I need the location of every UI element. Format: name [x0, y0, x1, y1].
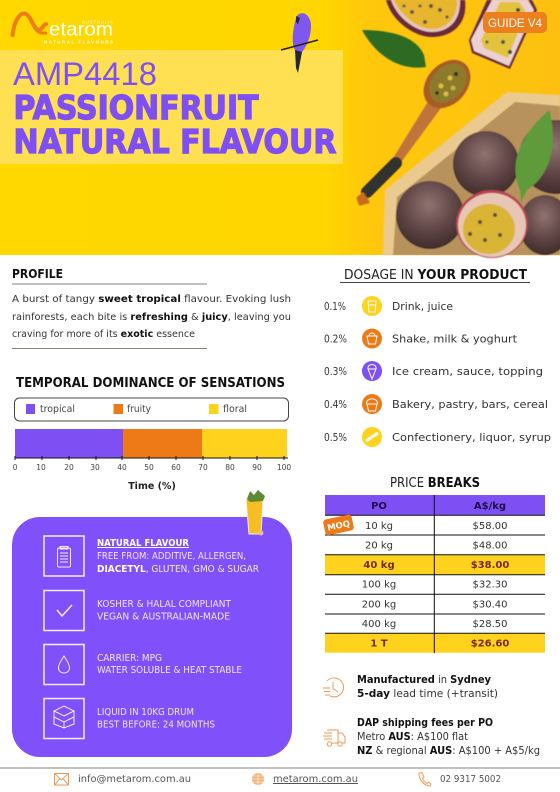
email: info@metarom.com.au: [78, 774, 191, 785]
dosage row: drink: Drink, juice: [392, 300, 453, 313]
icon: delivery truck: [323, 730, 345, 746]
icon: purple parrot: [281, 13, 318, 73]
axis label: Time (%): [128, 481, 176, 492]
dosage row: ice cream: [324, 361, 543, 381]
dosage row: confectionery: [324, 427, 551, 447]
table: price breaks: [323, 476, 545, 653]
icon: water drop: [44, 644, 84, 684]
time axis: [13, 456, 291, 472]
whole passionfruits: [396, 120, 560, 255]
legend: fruity: [127, 404, 151, 415]
table rows: 100 kg: [362, 580, 396, 590]
attribute text: natural flavour: FREE FROM: ADDITIVE, ALLERGEN,: [97, 551, 246, 562]
title: [13, 56, 336, 161]
dosage row: ice cream: Ice cream, sauce, topping: [392, 365, 543, 378]
table rows: 400 kg: [362, 619, 396, 630]
legend: tropical: [40, 404, 75, 415]
legend: floral: [223, 404, 247, 415]
profile description: rainforests, each bite is refreshing & juicy, leaving you: [12, 312, 291, 323]
header banner: [0, 0, 560, 258]
time axis: 20: [64, 463, 74, 472]
dosage row: bakery: 0.4%: [324, 398, 347, 411]
icon: clock: [323, 678, 344, 697]
logo: Metarom: AUSTRALIA: [82, 20, 113, 24]
chart title: TEMPORAL DOMINANCE OF SENSATIONS: [16, 376, 285, 391]
dosage row: drink: 0.1%: [324, 300, 346, 313]
manufacturing info: Manufactured in Sydney: [357, 673, 491, 686]
title: AMP4418: [13, 56, 157, 92]
passionfruit half, bottom: [456, 190, 528, 258]
table rows: $32.30: [472, 580, 508, 590]
icon: globe: [252, 773, 264, 785]
phone number: 02 9317 5002: [440, 774, 501, 785]
badge: MOQ: [323, 514, 354, 536]
wooden box: [383, 92, 560, 255]
panel: profile: PROFILE: [12, 266, 63, 281]
table rows: [362, 501, 509, 650]
attribute text: compliance: KOSHER & HALAL COMPLIANT: [97, 599, 231, 610]
icon: cocktail glass: [246, 490, 265, 536]
time axis: 60: [171, 463, 181, 472]
shipping info: Metro AUS: A$100 flat: [357, 730, 469, 743]
attribute text: packaging: [97, 707, 215, 730]
table heading: PRICE BREAKS: [390, 476, 480, 491]
time axis: 0: [13, 463, 18, 472]
dosage row: ice cream: 0.3%: [324, 365, 347, 378]
badge: guide version: [483, 12, 547, 33]
table rows: $30.40: [472, 600, 508, 610]
attribute text: carrier: [97, 653, 242, 676]
table rows: A$/kg: [474, 501, 506, 512]
table rows: $48.00: [472, 540, 508, 552]
time axis: 90: [252, 463, 262, 472]
attribute text: compliance: [97, 599, 231, 622]
table rows: $58.00: [472, 521, 508, 532]
attribute text: natural flavour: DIACETYL, GLUTEN, GMO & SUGAR: [97, 564, 260, 575]
time axis: 80: [225, 463, 235, 472]
logo: Metarom: NATURAL FLAVOURS: [44, 40, 113, 44]
wooden spoon: [358, 51, 480, 204]
time axis: 100: [277, 463, 291, 472]
shipping info: DAP shipping fees per PO: [357, 716, 493, 729]
green leaf, top: [362, 30, 426, 68]
time axis: 30: [90, 463, 100, 472]
time axis: 40: [117, 463, 127, 472]
badge: MOQ: MOQ: [327, 519, 351, 534]
profile description: A burst of tangy sweet tropical flavour. Evoking lush: [12, 294, 291, 305]
icon: check mark: [44, 590, 84, 630]
shipping info: NZ & regional AUS: A$100 + A$5/kg: [357, 744, 540, 757]
attribute text: compliance: VEGAN & AUSTRALIAN-MADE: [97, 612, 230, 622]
icon: clipboard: [44, 536, 84, 576]
attribute text: natural flavour: NATURAL FLAVOUR: [97, 538, 189, 549]
green leaf, box: [515, 110, 553, 202]
profile description: craving for more of its exotic essence: [12, 329, 195, 340]
stacked bar: [15, 429, 287, 458]
dosage row: shake: Shake, milk & yoghurt: [392, 332, 518, 346]
table rows: $28.50: [472, 619, 508, 630]
table rows: 1 T: [370, 638, 388, 650]
dosage row: shake: [324, 328, 518, 348]
dosage row: confectionery: Confectionery, liquor, syrup: [392, 431, 551, 444]
time axis: 10: [36, 463, 46, 472]
icon: open box: [44, 698, 84, 738]
table rows: 200 kg: [362, 600, 396, 610]
legend: [14, 398, 288, 421]
manufacturing info: 5-day lead time (+transit): [357, 687, 498, 700]
footer contacts: [54, 772, 501, 786]
website: metarom.com.au: [273, 774, 358, 785]
attribute text: carrier: CARRIER: MPG: [97, 653, 162, 664]
icon: phone: [419, 772, 431, 786]
table rows: 40 kg: [363, 560, 395, 571]
logo: Metarom: etarom: [49, 20, 113, 40]
shipping info: [323, 716, 540, 757]
title background strip: [0, 50, 343, 164]
time axis: 50: [144, 463, 154, 472]
dosage row: bakery: [324, 394, 548, 414]
attribute text: packaging: LIQUID IN 10KG DRUM: [97, 707, 194, 718]
panel: dosage: [324, 268, 551, 447]
dosage row: drink: [324, 296, 453, 316]
passionfruit half, top right: [469, 0, 537, 69]
passionfruit half, top left: [386, 0, 465, 37]
dosage row: confectionery: 0.5%: [324, 431, 347, 444]
dosage heading: DOSAGE IN YOUR PRODUCT: [344, 268, 527, 283]
attribute text: packaging: BEST BEFORE: 24 MONTHS: [97, 720, 215, 730]
logo: Metarom: [12, 14, 113, 44]
time axis: 70: [198, 463, 208, 472]
badge: guide version: GUIDE V4: [488, 18, 543, 30]
table fills: [325, 495, 545, 653]
panel: product attributes: [12, 517, 292, 757]
dosage row: shake: 0.2%: [324, 332, 347, 346]
icon: envelope: [54, 774, 68, 785]
table rows: $26.60: [471, 638, 509, 650]
panel: profile: [12, 266, 291, 349]
chart: temporal dominance of sensations: [13, 376, 291, 492]
title: PASSIONFRUIT: [14, 88, 259, 127]
table rows: 20 kg: [365, 540, 393, 552]
photo: passionfruit and wooden spoon: [358, 0, 560, 258]
table rows: PO: [371, 501, 387, 512]
attribute text: natural flavour: [97, 538, 260, 575]
manufacturing info: [323, 673, 498, 700]
table rows: $38.00: [471, 560, 509, 571]
title: NATURAL FLAVOUR: [14, 122, 336, 161]
profile description: [12, 294, 291, 340]
attribute text: carrier: WATER SOLUBLE & HEAT STABLE: [97, 665, 242, 676]
table rows: 10 kg: [365, 521, 393, 532]
dosage row: bakery: Bakery, pastry, bars, cereal: [392, 398, 548, 411]
